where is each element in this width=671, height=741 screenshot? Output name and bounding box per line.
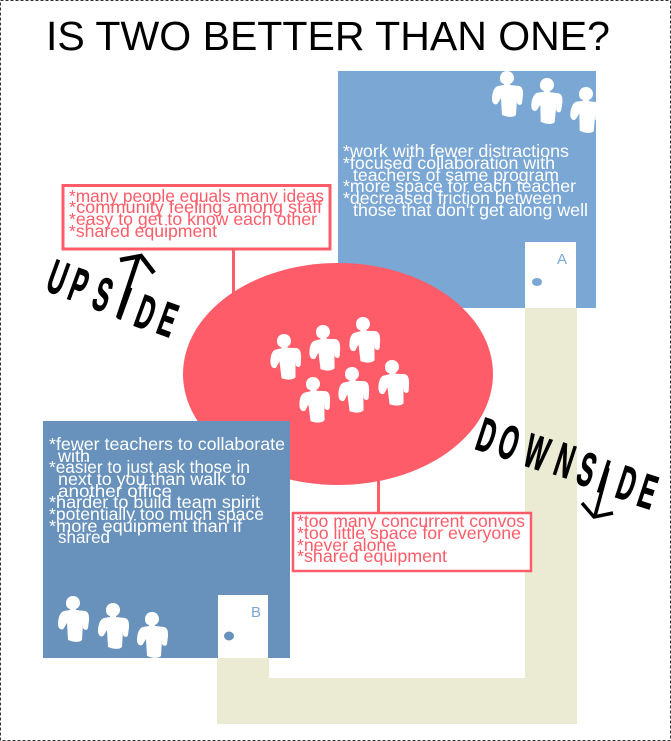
callout: downside: [293, 511, 531, 571]
callout: upside: *community feeling among staff: [69, 197, 322, 217]
office A text: *work with fewer distractions: [343, 141, 569, 161]
office B text: [49, 434, 285, 547]
title: IS TWO BETTER THAN ONE?: [46, 13, 610, 59]
office B text: next to you than walk to: [58, 469, 246, 489]
callout: upside: *many people equals many ideas: [69, 186, 324, 206]
door B: B: [251, 604, 261, 621]
callout: upside: *easy to get to know each other: [69, 209, 317, 229]
office B text: *more equipment than if: [49, 516, 242, 536]
door A: [525, 242, 576, 308]
heading: upside with arrow: [40, 251, 184, 348]
heading: upside with arrow: I: [112, 279, 137, 331]
office A text: [343, 141, 588, 220]
callout: upside: [63, 186, 330, 249]
callout: upside: *shared equipment: [69, 221, 217, 241]
office B text: with: [57, 446, 90, 466]
heading: upside with arrow: P: [62, 259, 95, 314]
office B text: another office: [58, 481, 172, 501]
heading: upside with arrow: U: [40, 251, 75, 307]
heading: downside with arrow: E: [632, 465, 663, 520]
office A text: *focused collaboration with: [343, 153, 555, 173]
heading: upside with arrow: E: [151, 293, 184, 348]
callout: downside: *never alone: [297, 535, 396, 555]
callout: downside: *shared equipment: [297, 546, 447, 566]
heading: downside with arrow: I: [592, 451, 615, 504]
door A: A: [557, 251, 567, 268]
heading: downside with arrow: N: [548, 434, 581, 490]
heading: downside with arrow: D: [470, 409, 503, 465]
heading: upside with arrow: D: [128, 286, 163, 342]
icon: people group B: [58, 596, 168, 658]
office B text: *fewer teachers to collaborate: [49, 434, 285, 454]
central shared office ellipse: [183, 263, 493, 485]
door B: [218, 595, 268, 658]
office A text: *decreased friction between: [343, 188, 562, 208]
panel: office A: [338, 71, 602, 308]
heading: upside with arrow: S: [86, 268, 119, 323]
heading: downside with arrow: S: [571, 443, 602, 498]
icon: people group shared office: [269, 316, 411, 424]
connector: downside callout to ellipse: [377, 480, 380, 513]
office A text: those that don't get along well: [353, 200, 588, 220]
icon: people group A: [492, 71, 602, 133]
heading: downside with arrow: D: [610, 457, 643, 513]
office B text: *harder to build team spirit: [49, 492, 260, 512]
office A text: *more space for each teacher: [343, 176, 576, 196]
callout: downside: *too many concurrent convos: [297, 511, 525, 531]
hallway path between offices: [217, 308, 577, 724]
office B text: shared: [58, 527, 110, 547]
panel: office B: [43, 421, 290, 658]
heading: downside with arrow: W: [517, 425, 556, 483]
callout: downside: *too little space for everyone: [297, 523, 521, 543]
heading: downside with arrow: [470, 409, 663, 520]
connector: upside callout to ellipse: [232, 250, 235, 295]
heading: downside with arrow: O: [491, 416, 526, 472]
office B text: *easier to just ask those in: [49, 457, 250, 477]
office B text: *potentially too much space: [49, 504, 264, 524]
office A text: teachers of same program: [353, 165, 559, 185]
